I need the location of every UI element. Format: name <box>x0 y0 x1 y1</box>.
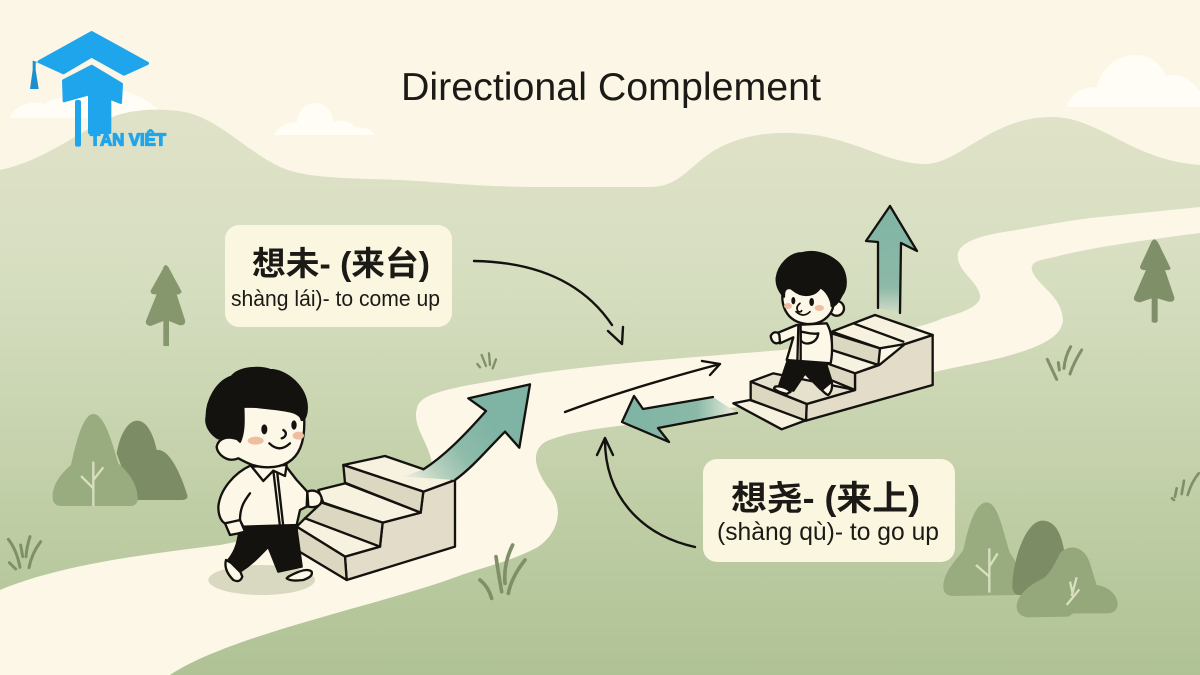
callout text: go up: (shàng qù)- to go up <box>717 518 939 546</box>
tree: right pine <box>1134 239 1174 323</box>
right staircase and figure <box>733 252 933 429</box>
logo cap <box>39 33 147 74</box>
logo tassel <box>30 61 39 89</box>
bushes: right group <box>943 502 1118 617</box>
logo arrow <box>63 66 122 133</box>
main teal arrow outline <box>423 384 530 480</box>
left staircase and figure <box>206 368 530 595</box>
tuft: centre large <box>480 545 525 598</box>
staircase <box>297 456 455 580</box>
callout heading: come up: 想未- (来台) <box>252 245 430 282</box>
curved arrow: second callout to centre <box>597 438 695 547</box>
thin arrow: toward upper stairs <box>565 361 720 412</box>
small figure: walking boy <box>771 252 846 395</box>
dark bush <box>117 421 187 500</box>
tree: left pine <box>146 265 185 346</box>
large figure: walking man <box>206 368 322 581</box>
callout heading: go up: 想尧- (来上) <box>731 480 920 518</box>
teal arrow: up <box>866 206 917 313</box>
tuft: lower right <box>1172 473 1199 500</box>
logo wordmark: TÂN VIÊT <box>90 129 166 149</box>
light bush <box>53 414 138 506</box>
dark bush <box>1012 521 1064 595</box>
callout: to go up <box>703 459 955 562</box>
cloud: top right <box>1067 55 1200 107</box>
logo: Tan Viet <box>30 33 166 149</box>
cloud: behind logo <box>10 90 162 118</box>
tuft: right <box>1047 347 1082 379</box>
teal arrow: left <box>622 396 737 442</box>
cloud: centre <box>274 103 375 135</box>
curved arrow: callout to centre <box>474 261 623 344</box>
light bush <box>943 502 1020 596</box>
callout: to come up <box>225 225 452 327</box>
callout text: come up: shàng lái)- to come up <box>231 286 440 311</box>
logo bar <box>75 100 81 147</box>
ground shadow <box>208 565 315 595</box>
bushes: left group <box>53 414 187 506</box>
staircase <box>733 315 933 429</box>
winding cream path <box>0 207 1200 675</box>
title: Directional Complement <box>401 66 821 109</box>
tuft: centre small <box>477 353 496 368</box>
tuft: left <box>8 537 41 569</box>
front bush <box>1017 547 1118 617</box>
main teal arrow <box>403 384 530 480</box>
grass tufts <box>8 347 1199 598</box>
